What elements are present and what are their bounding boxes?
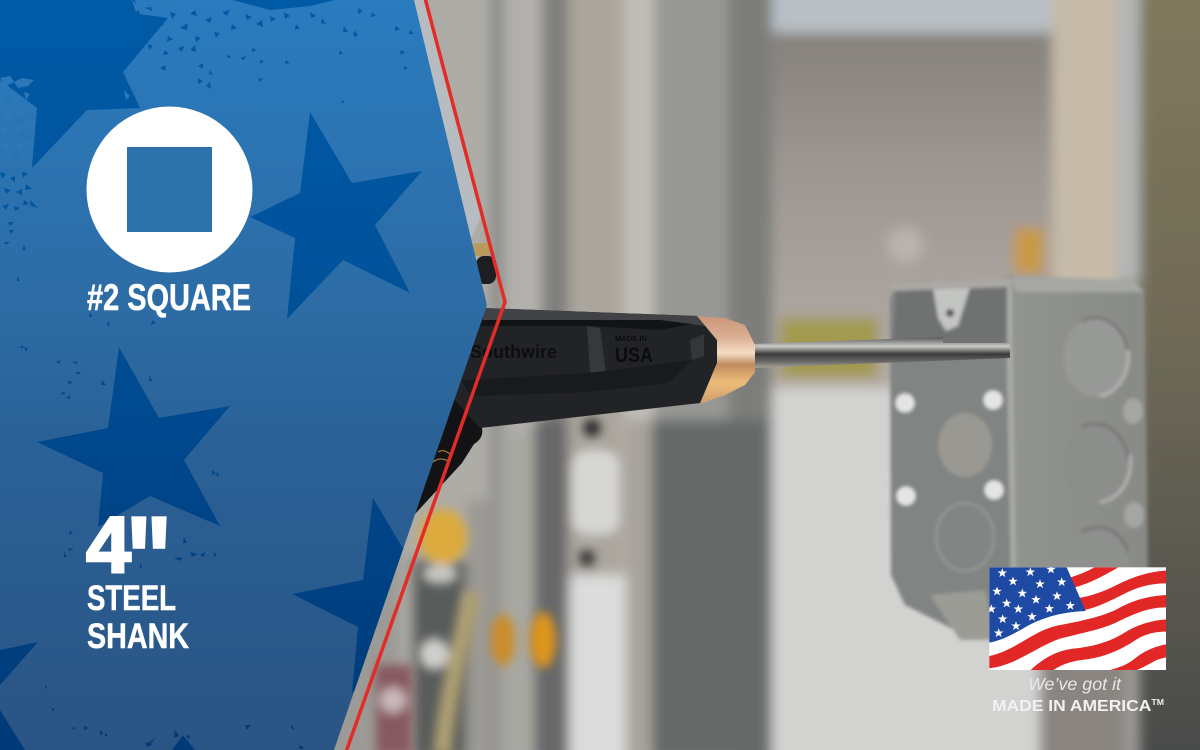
length: 4 inch: " — [126, 492, 172, 626]
length: 4 inch — [86, 492, 172, 626]
tagline: we've got it: We’ve got it — [1028, 674, 1122, 694]
object behind handle — [472, 243, 496, 284]
glove — [415, 395, 482, 514]
canton stars — [987, 565, 1075, 637]
tagline: made in america: MADE IN AMERICA — [992, 698, 1138, 715]
made in usa mark: MADE IN — [615, 336, 647, 343]
box front face — [890, 279, 1016, 640]
handle brand text: Southwire — [470, 342, 557, 362]
length: 4 inch: 4 — [86, 500, 132, 589]
mounting holes — [896, 394, 914, 412]
handle — [450, 308, 717, 428]
screwdriver — [415, 243, 1010, 514]
made in usa mark: USA — [615, 344, 653, 367]
light strip along panel — [414, 0, 482, 240]
canton — [989, 567, 1086, 643]
junction box — [890, 276, 1148, 640]
opening interior shadow — [893, 287, 1007, 348]
screw tab — [932, 281, 972, 331]
icon: american flag — [987, 565, 1166, 670]
copper ferrule — [697, 316, 755, 404]
icon: square drive — [86, 106, 252, 272]
panel stars — [0, 0, 422, 750]
label: steel shank — [87, 579, 189, 656]
knockouts — [1063, 317, 1129, 397]
label: steel shank: STEEL — [87, 579, 176, 618]
glove stitching — [433, 451, 452, 462]
tagline: made in america: TM — [1151, 698, 1164, 707]
box side face — [1004, 276, 1148, 640]
made in usa mark — [615, 336, 653, 367]
shank — [752, 337, 1010, 368]
label: steel shank: SHANK — [87, 617, 189, 656]
heading: #2 square: #2 SQUARE — [87, 277, 251, 318]
distressed texture specks — [145, 5, 414, 103]
lighter scuffs on corner star — [0, 0, 152, 100]
blue panel — [0, 0, 487, 750]
red outline chevron — [346, 0, 505, 750]
